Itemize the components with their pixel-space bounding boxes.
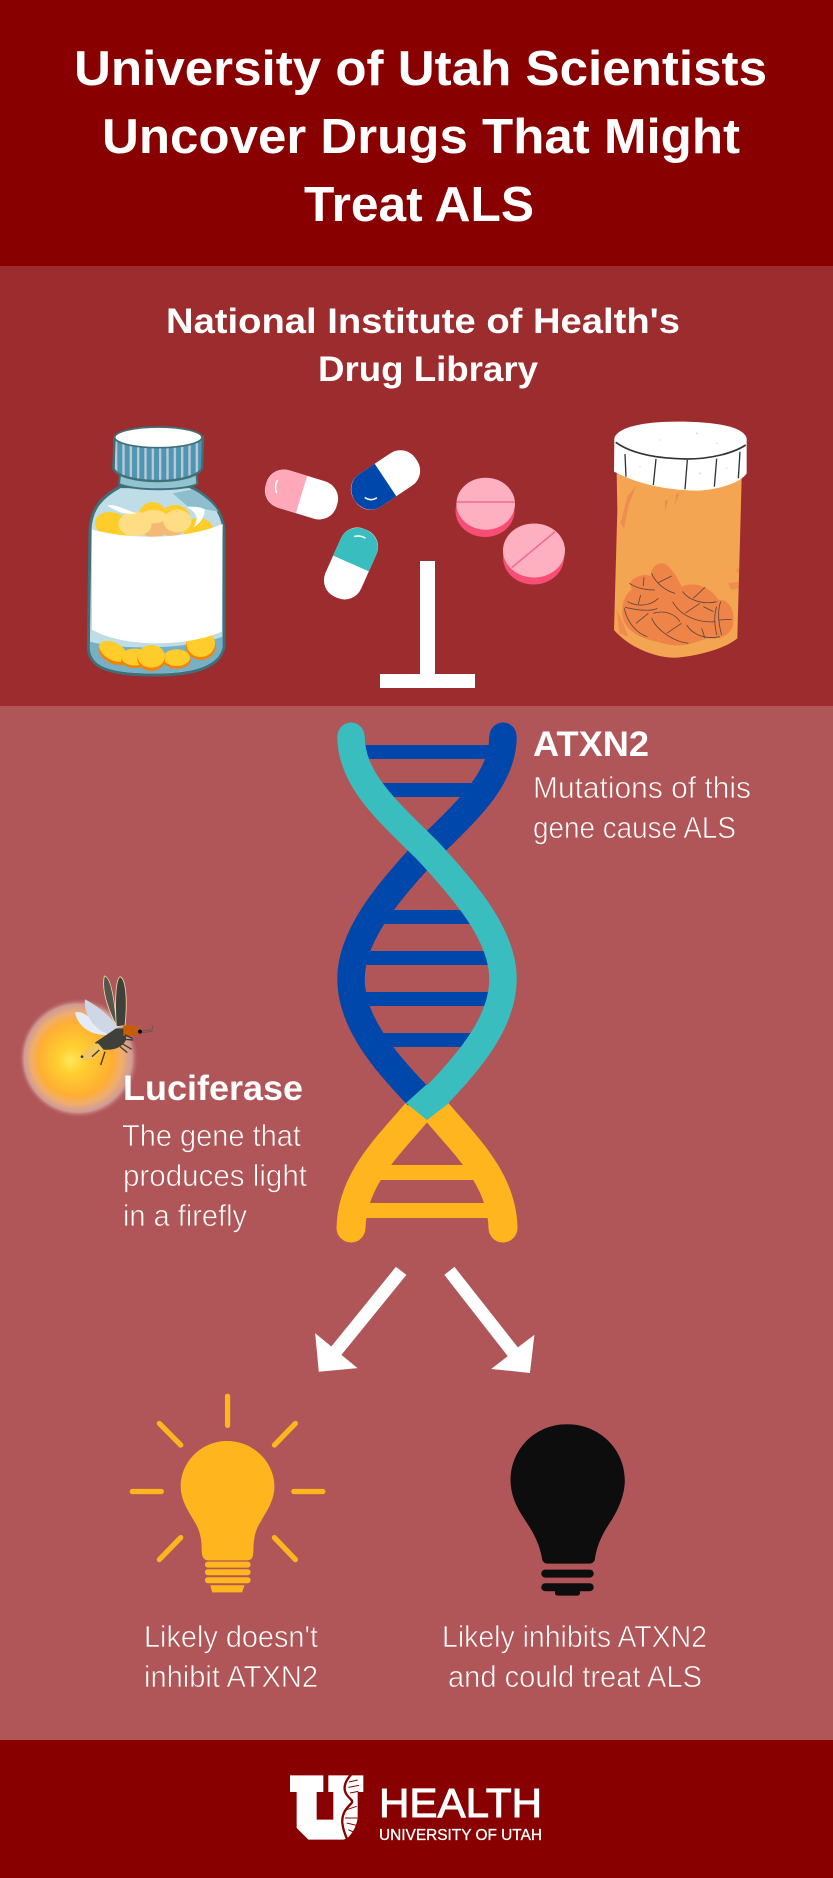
title: University of Utah Scientists	[74, 42, 767, 96]
text block: dark bulb caption: and could treat ALS	[448, 1659, 702, 1694]
icon: dark light bulb	[511, 1424, 625, 1596]
text block: Luciferase	[122, 1069, 307, 1233]
heading: drug library: Drug Library	[318, 350, 539, 389]
panel: drug library	[0, 266, 833, 706]
blue base pairs	[353, 745, 501, 1047]
text block: Luciferase: The gene that	[122, 1118, 301, 1153]
panel: title header	[0, 0, 833, 266]
title: Treat ALS	[304, 178, 534, 232]
teal strand	[351, 736, 503, 1096]
icon: glowing firefly	[19, 976, 153, 1118]
heading: drug library: National Institute of Health's	[166, 302, 680, 341]
icon: lit yellow light bulb	[132, 1396, 323, 1592]
panel: gene assay	[0, 706, 833, 1740]
blue strand	[351, 736, 503, 1096]
logo wordmark: HEALTH	[379, 1780, 542, 1826]
icon: pink tablet tilted	[503, 524, 565, 584]
icon: pink and white capsule	[260, 465, 343, 524]
text block: ATXN2: ATXN2	[533, 725, 649, 764]
text block: ATXN2: Mutations of this	[533, 770, 751, 805]
cap	[614, 422, 747, 491]
logo: University of Utah Health: UNIVERSITY OF UTAH	[379, 1827, 542, 1844]
logo mark: block U with DNA	[290, 1775, 363, 1840]
text block: Luciferase: in a firefly	[123, 1198, 247, 1233]
text block: ATXN2	[533, 725, 751, 845]
icon: orange prescription bottle	[614, 422, 747, 658]
firefly insect	[75, 976, 153, 1065]
cap	[113, 437, 203, 481]
icon: pink tablet	[456, 478, 515, 537]
text block: lit bulb caption: Likely doesn't	[144, 1619, 318, 1654]
arrow: to lit bulb	[315, 1267, 406, 1372]
text block: Luciferase: produces light	[123, 1158, 307, 1193]
text block: lit bulb caption: inhibit ATXN2	[144, 1659, 318, 1694]
logo: University of Utah Health	[290, 1775, 542, 1844]
label	[92, 524, 223, 643]
pills inside bottle	[622, 563, 734, 645]
text block: ATXN2: gene cause ALS	[533, 810, 736, 845]
panel: footer	[0, 1740, 833, 1878]
text block: dark bulb caption: Likely inhibits ATXN2	[442, 1619, 707, 1654]
icon: blue and white capsule	[344, 443, 427, 517]
text block: Luciferase: Luciferase	[123, 1069, 303, 1108]
icon: inhibition symbol	[380, 561, 475, 688]
title	[74, 42, 767, 232]
icon: DNA double helix	[338, 722, 516, 1228]
bottom pills	[95, 638, 132, 670]
heading: drug library	[166, 302, 680, 389]
text block: dark bulb caption	[442, 1619, 707, 1694]
yellow base pairs	[355, 1165, 499, 1218]
title: Uncover Drugs That Might	[102, 110, 740, 164]
neck	[119, 475, 197, 489]
arrow: to dark bulb	[444, 1267, 534, 1373]
icon: glass pill bottle	[88, 427, 224, 675]
yellow strand ends	[351, 1100, 503, 1228]
firefly glow	[19, 998, 139, 1118]
text block: lit bulb caption	[144, 1619, 318, 1694]
icon: teal and white capsule	[318, 522, 384, 605]
